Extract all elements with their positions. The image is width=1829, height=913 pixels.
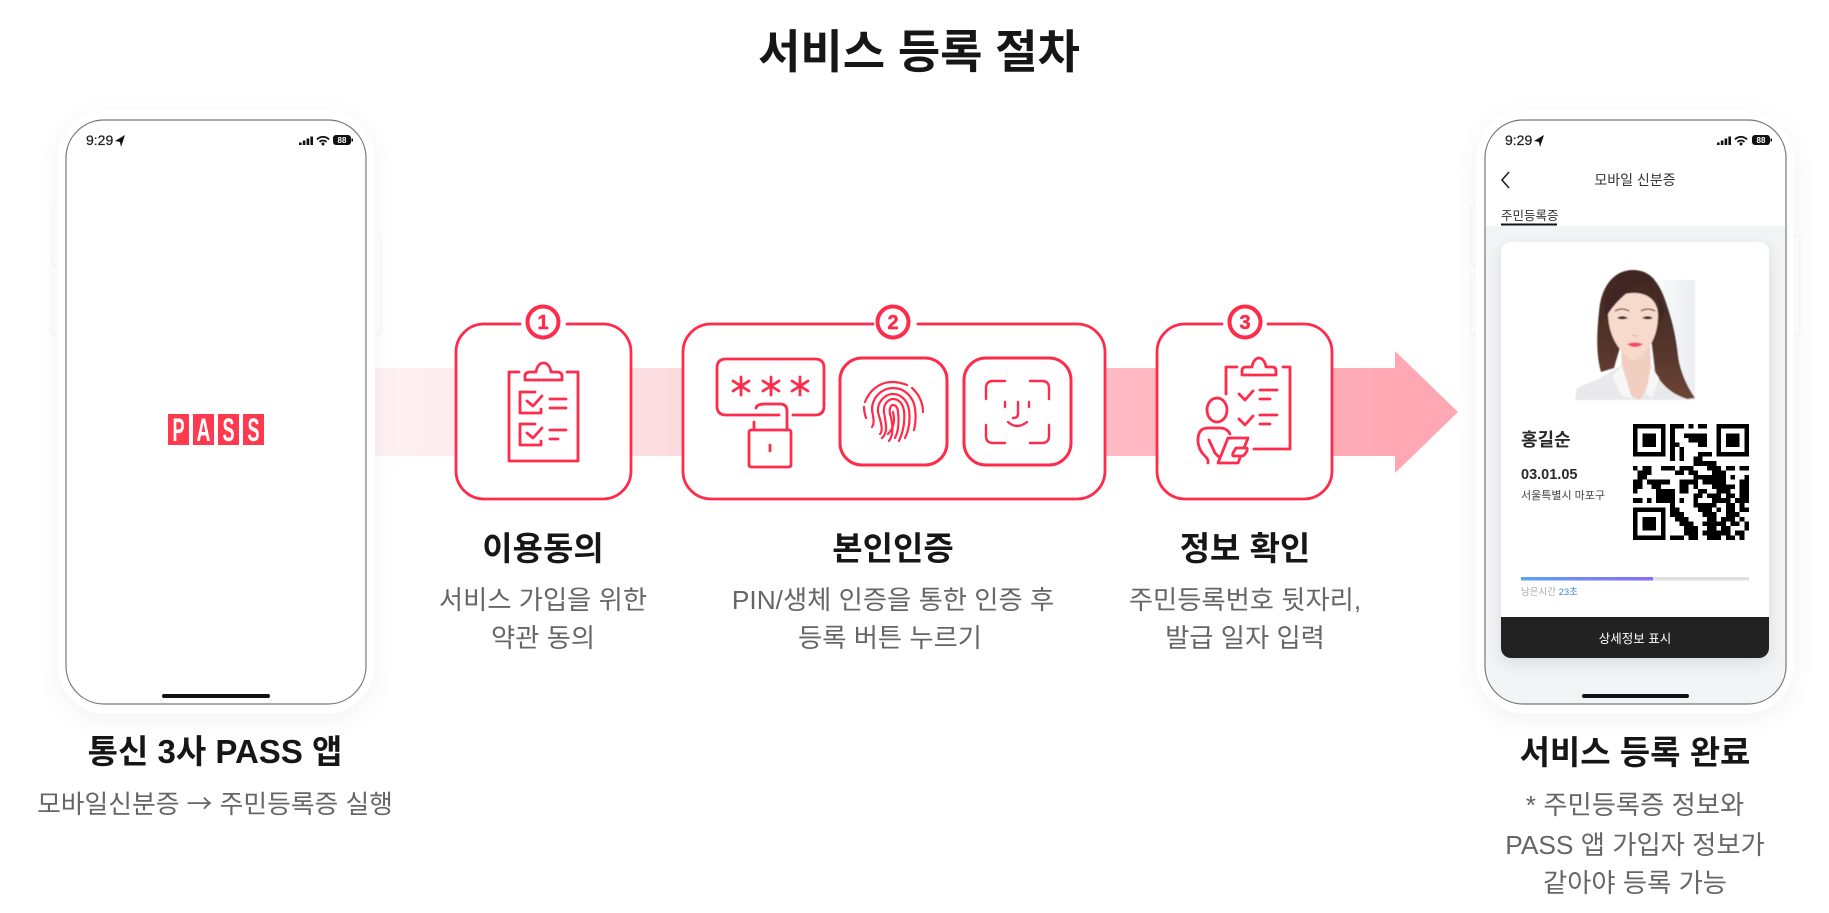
- icon: PASS logo: S: [222, 412, 234, 448]
- icon: PASS logo: P: [172, 412, 184, 448]
- icon: PIN password and lock: [717, 359, 824, 467]
- text: remaining time: 남은시간 23초: [1521, 587, 1578, 598]
- text: nav title: 모바일 신분증: [1594, 172, 1676, 188]
- text: address: 서울특별시 마포구: [1521, 489, 1605, 502]
- button: show details: 상세정보 표시: [1599, 632, 1671, 646]
- badge: 2: [878, 306, 908, 338]
- badge: 3: [1230, 306, 1260, 338]
- QR code: [1633, 424, 1749, 540]
- panel: step 3: [1157, 306, 1332, 499]
- title: 서비스 등록 절차: [758, 26, 1080, 78]
- image: portrait: [1575, 270, 1695, 400]
- progress bar: [1521, 577, 1749, 580]
- arrow: process band: [375, 351, 1458, 473]
- panel: step 1: [456, 306, 631, 499]
- text: completion heading: 서비스 등록 완료: [1520, 734, 1750, 771]
- text: step 3 heading: 정보 확인: [1180, 530, 1310, 567]
- icon: back chevron: [1502, 172, 1509, 188]
- button: show details: [1501, 617, 1769, 658]
- panel: ID card: [1501, 242, 1769, 658]
- phone: PASS app: [52, 110, 381, 714]
- status bar: 9:29: [1505, 132, 1532, 148]
- text: completion note: * 주민등록증 정보와: [1526, 790, 1744, 820]
- icon: face recognition: [964, 358, 1071, 465]
- text: step 1 description: 약관 동의: [491, 623, 595, 653]
- status bar: 9:29: [86, 132, 113, 148]
- text: step 2 description: PIN/생체 인증을 통한 인증 후: [732, 585, 1054, 615]
- icon: PASS logo: S: [248, 412, 260, 448]
- status bar: [86, 132, 353, 148]
- text: step 3 description: 발급 일자 입력: [1165, 623, 1325, 653]
- text: completion note: 같아야 등록 가능: [1543, 868, 1727, 898]
- text: step 1 description: 서비스 가입을 위한: [439, 585, 647, 615]
- badge: 1: 1: [537, 312, 549, 334]
- text: step 2 heading: 본인인증: [832, 530, 954, 567]
- phone: mobile ID: [1471, 110, 1800, 714]
- text: step 2 description: 등록 버튼 누르기: [798, 623, 982, 653]
- text: step 1 heading: 이용동의: [482, 530, 604, 567]
- icon: PASS logo: [168, 412, 264, 448]
- text: step 3 description: 주민등록번호 뒷자리,: [1129, 585, 1361, 615]
- icon: fingerprint: [840, 358, 947, 465]
- status bar: 88: [1757, 136, 1766, 145]
- badge: 3: 3: [1239, 312, 1251, 334]
- badge: 2: 2: [887, 312, 899, 334]
- text: name: 홍길순: [1521, 430, 1571, 450]
- icon: PASS logo: A: [196, 412, 210, 448]
- status bar: [1505, 132, 1772, 148]
- badge: 1: [528, 306, 558, 338]
- text: date of birth: 03.01.05: [1521, 467, 1577, 483]
- text: completion note: PASS 앱 가입자 정보가: [1505, 830, 1765, 860]
- text: PASS app description: 모바일신분증 → 주민등록증 실행: [37, 784, 393, 821]
- status bar: 88: [338, 136, 347, 145]
- text: PASS app heading: 통신 3사 PASS 앱: [88, 733, 342, 770]
- icon: person with checklist: [1198, 358, 1290, 463]
- tab: resident card: 주민등록증: [1501, 209, 1559, 223]
- icon: clipboard checklist: [509, 363, 578, 461]
- panel: step 2: [683, 306, 1105, 499]
